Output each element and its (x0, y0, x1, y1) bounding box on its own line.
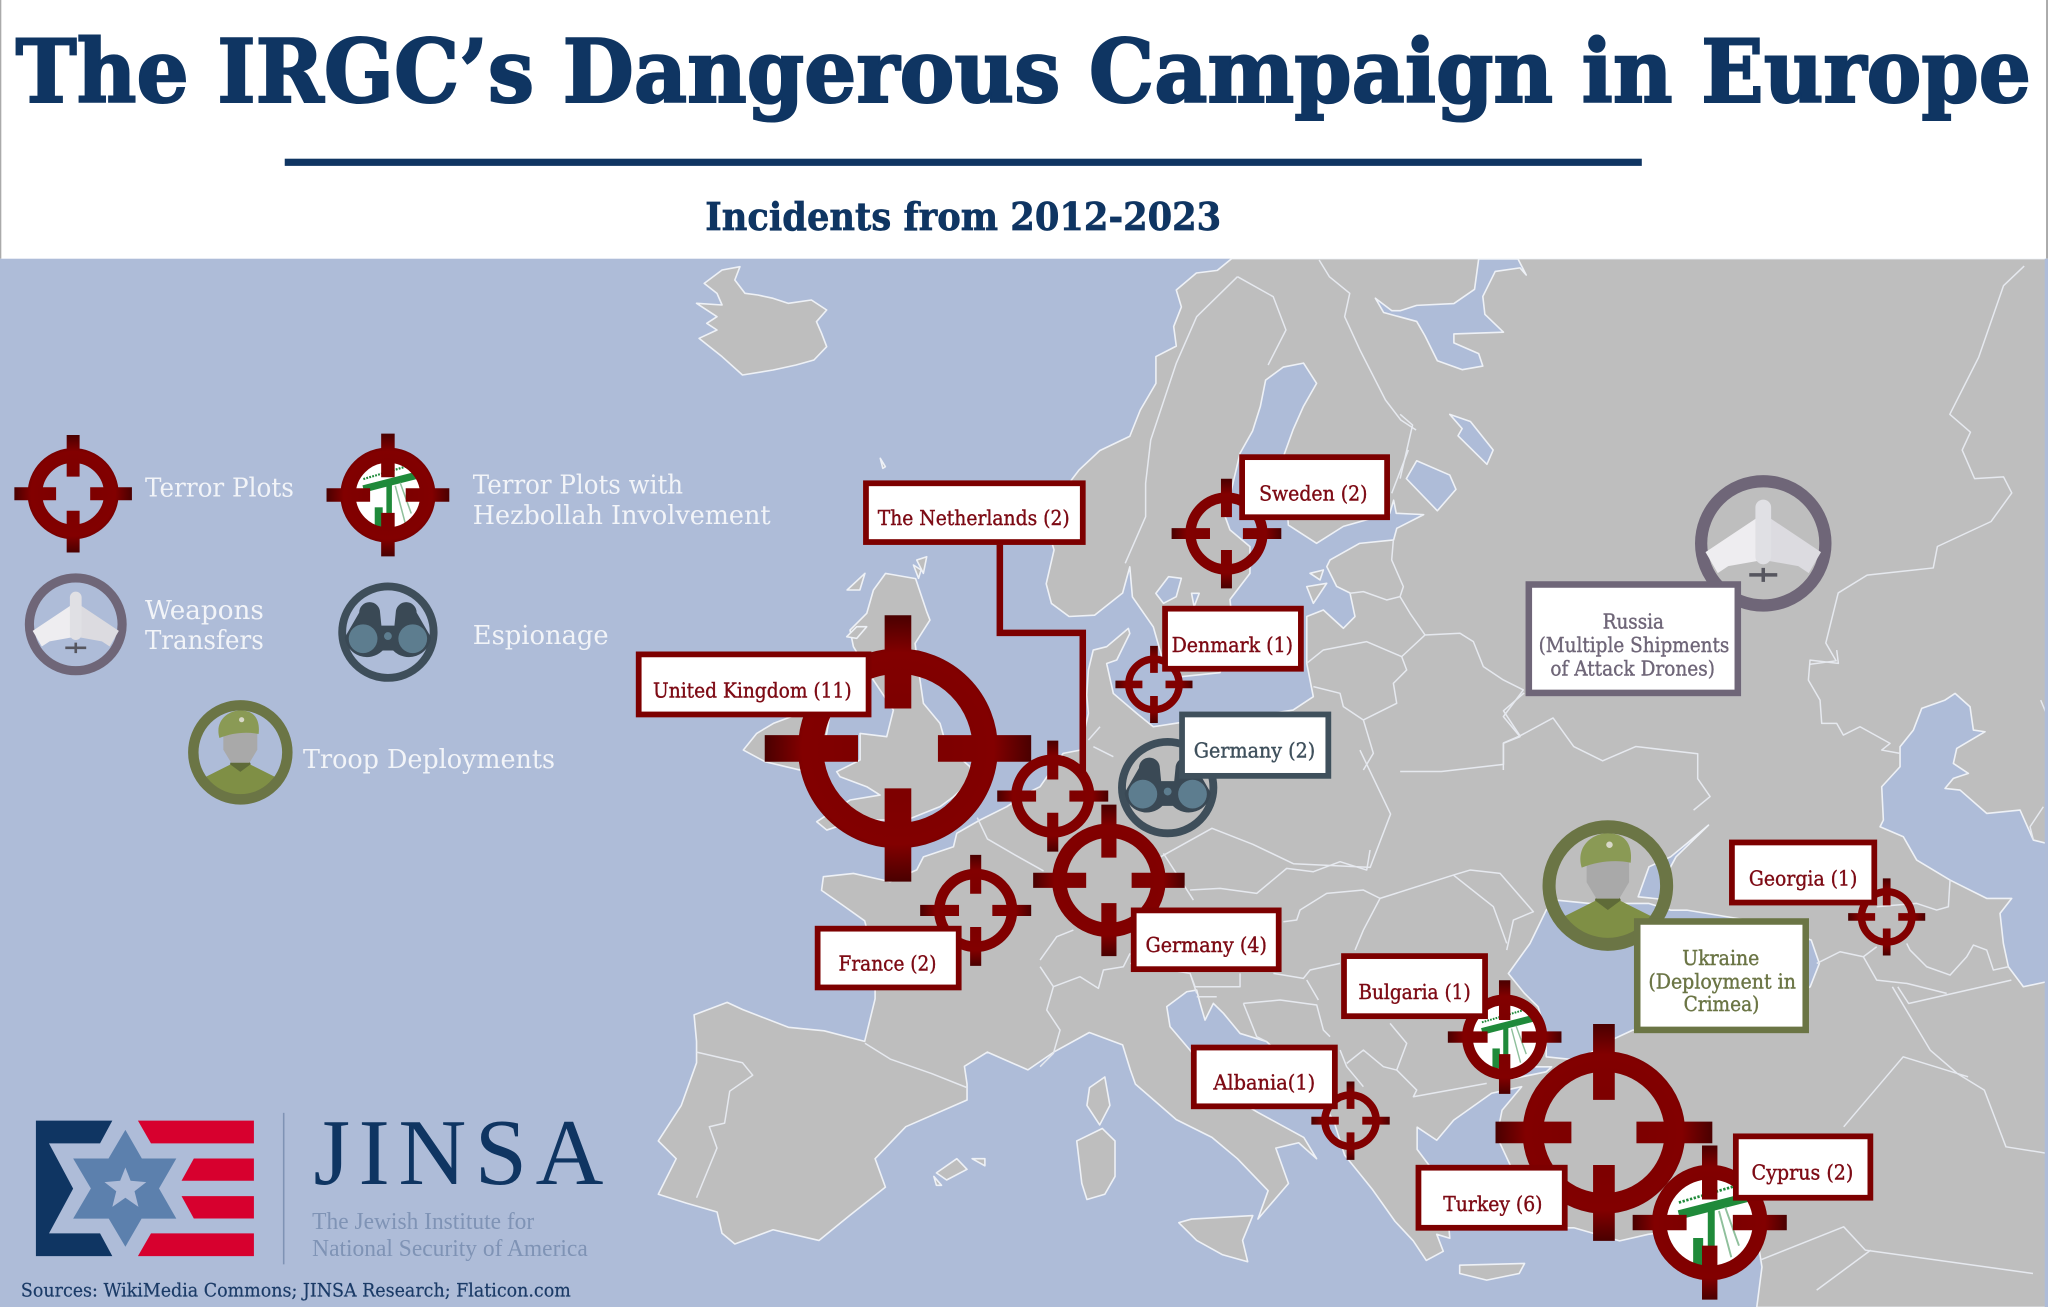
legend icon: espionage (342, 586, 434, 678)
label: Ukraine: Ukraine (1682, 946, 1759, 970)
label: Denmark (1165, 609, 1301, 669)
label: Russia: of Attack Drones) (1550, 656, 1715, 680)
legend (14, 434, 771, 799)
marker: Georgia target (1848, 878, 1925, 955)
label: Georgia (1732, 842, 1874, 903)
legend label: weapons transfers: Weapons (145, 596, 264, 626)
legend label: Hezbollah involvement: Terror Plots with (473, 471, 683, 501)
marker: Bulgaria Hezbollah target (1448, 980, 1561, 1094)
marker: Turkey target (1496, 1024, 1712, 1241)
marker: Russia drone (1701, 481, 1825, 605)
label: Ukraine (1637, 921, 1806, 1030)
label: Turkey (1418, 1168, 1565, 1228)
label: Bulgaria: Bulgaria (1) (1358, 980, 1471, 1004)
legend label: Hezbollah involvement: Hezbollah Involvement (473, 501, 771, 531)
legend icon: terror plots with Hezbollah (327, 434, 449, 556)
Black Sea (1460, 825, 2048, 1290)
legend label: espionage: Espionage (473, 621, 609, 651)
label: Germany espionage: Germany (2) (1194, 739, 1315, 763)
label: United Kingdom: United Kingdom (11) (653, 678, 852, 702)
label: United Kingdom (639, 654, 869, 714)
map of Europe (658, 259, 2048, 1307)
label: Sweden: Sweden (2) (1259, 481, 1368, 505)
label: Germany espionage (1182, 714, 1328, 776)
logo: JINSA: JINSA (313, 1101, 604, 1205)
label: Russia: (Multiple Shipments (1539, 633, 1729, 657)
label: Bulgaria (1344, 956, 1485, 1016)
marker: Cyprus Hezbollah target (1633, 1145, 1787, 1300)
Ireland and western isles (743, 557, 1113, 770)
label: Turkey: Turkey (6) (1443, 1192, 1543, 1216)
marker: Ukraine troops (1549, 827, 1667, 944)
White Sea and lakes (1375, 259, 2048, 810)
connector: Netherlands (1000, 545, 1083, 773)
marker: Germany espionage binoculars (1122, 742, 1213, 833)
label: Cyprus (1736, 1136, 1870, 1198)
legend icon: troop deployments (193, 705, 287, 799)
logo: JINSA: National Security of America (312, 1235, 588, 1262)
mainland (658, 259, 2048, 1307)
marker: Germany target (1033, 805, 1185, 956)
marker: Sweden target (1172, 479, 1281, 588)
central Europe borders (1040, 850, 1533, 1097)
label: Ukraine: Crimea) (1684, 992, 1759, 1016)
marker: Albania target (1311, 1081, 1390, 1160)
label: Denmark: Denmark (1) (1172, 633, 1293, 657)
label: Georgia: Georgia (1) (1749, 867, 1857, 891)
label: France (818, 929, 959, 987)
label: Germany plots (1134, 910, 1279, 969)
marker: Denmark target (1115, 646, 1192, 723)
label: The Netherlands: The Netherlands (2) (878, 506, 1070, 530)
label: The Netherlands (866, 483, 1083, 542)
logo: JINSA (36, 1101, 604, 1264)
western and southern details (697, 750, 1391, 1262)
legend label: terror plots: Terror Plots (145, 473, 294, 503)
Great Britain (817, 573, 972, 830)
label: Albania: Albania(1) (1212, 1070, 1315, 1094)
legend icon: terror plots (14, 435, 132, 553)
legend label: weapons transfers (145, 596, 264, 656)
legend label: troop deployments: Troop Deployments (303, 745, 555, 775)
label: Albania (1194, 1048, 1335, 1106)
marker: France target (920, 855, 1031, 966)
subtitle: Incidents from 2012-2023 (705, 194, 1221, 239)
northern details (697, 260, 1416, 607)
label: Ukraine: (Deployment in (1648, 970, 1796, 994)
marker: United Kingdom target (765, 615, 1031, 882)
label: Russia (1529, 585, 1738, 693)
label: Russia: Russia (1603, 609, 1664, 633)
right edge strip (2045, 259, 2048, 1307)
Caspian Sea (1808, 650, 2047, 993)
header panel (0, 0, 2048, 259)
label: Germany plots: Germany (4) (1145, 933, 1267, 957)
marker: Netherlands target (997, 741, 1108, 852)
legend label: weapons transfers: Transfers (145, 626, 264, 656)
label: Cyprus: Cyprus (2) (1752, 1160, 1853, 1184)
label: Sweden (1242, 457, 1387, 517)
logo: JINSA: The Jewish Institute for (312, 1208, 534, 1235)
legend icon: weapons transfers (29, 578, 122, 671)
sources note: Sources: WikiMedia Commons; JINSA Research; Flaticon.com (21, 1279, 571, 1301)
Baltic states details (1307, 450, 1523, 770)
legend label: Hezbollah involvement (473, 471, 771, 531)
label: France: France (2) (839, 951, 936, 975)
